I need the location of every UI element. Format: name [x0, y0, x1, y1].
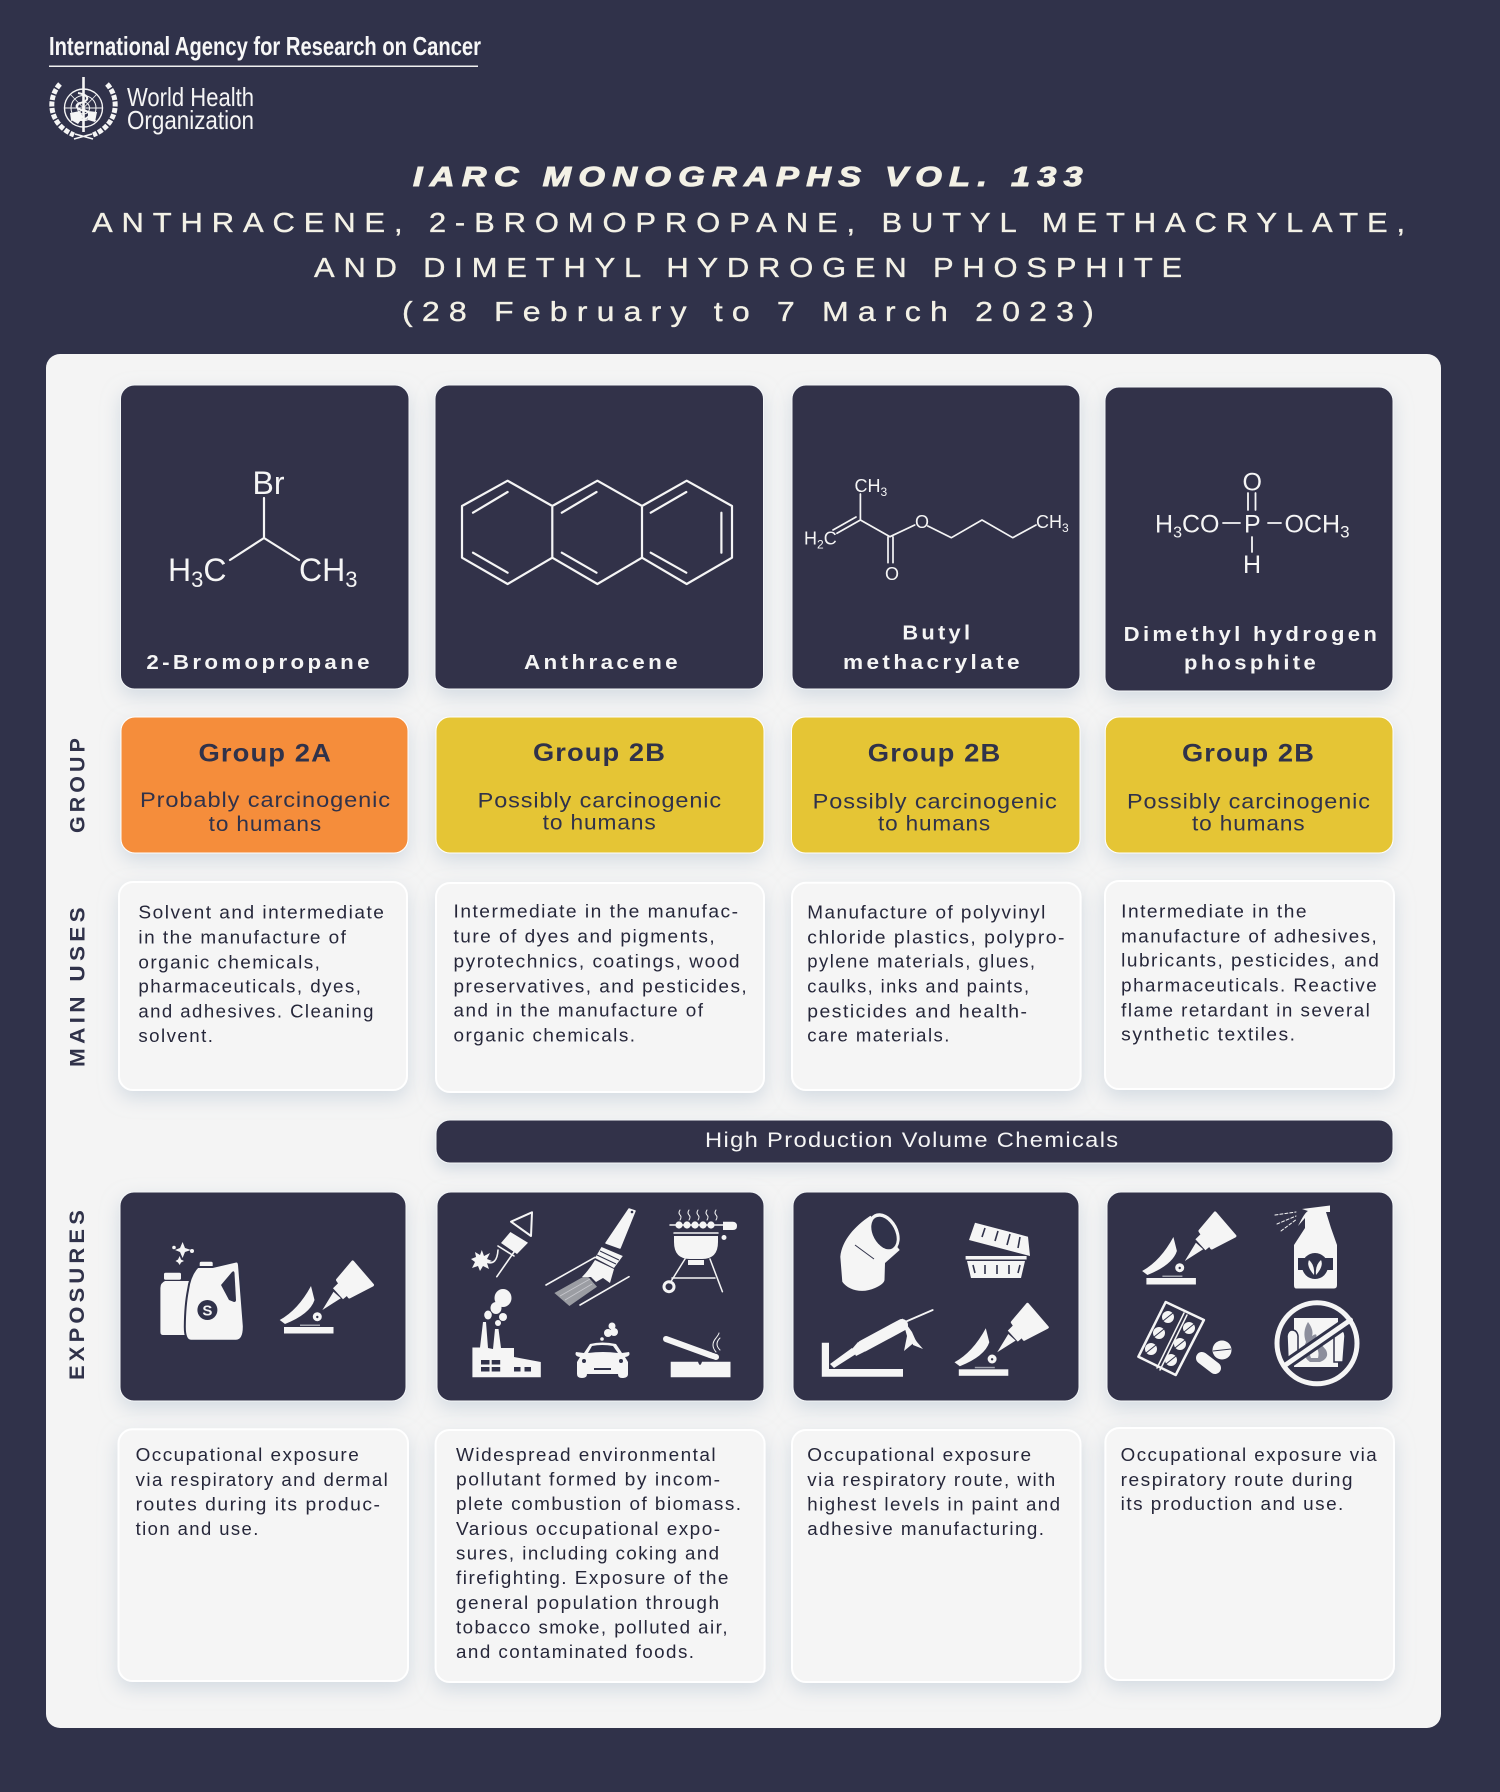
title line: agents: ANTHRACENE, 2-BROMOPROPANE, BUTYL METHACRYLATE, — [92, 207, 1414, 238]
molecule: butyl methacrylate: O — [885, 564, 899, 584]
main uses card: 2-bromopropane: solvent. — [138, 1026, 214, 1046]
main uses card: butyl methacrylate: chloride plastics, polypro- — [807, 927, 1066, 947]
main uses card: anthracene: Intermediate in the manufac- — [454, 902, 740, 922]
main uses card: dimethyl hydrogen phosphite — [1105, 881, 1394, 1089]
icon: cleaning bottles — [160, 1242, 244, 1341]
main uses card: 2-bromopropane: and adhesives. Cleaning — [138, 1001, 375, 1021]
main uses card: 2-bromopropane: in the manufacture of — [138, 927, 347, 947]
main uses card: anthracene: ture of dyes and pigments, — [454, 926, 716, 946]
title line: monograph volume: IARC MONOGRAPHS VOL. 133 — [413, 161, 1090, 192]
molecule: butyl methacrylate: 3 — [1062, 521, 1069, 535]
molecule: 2-bromopropane: C — [203, 552, 226, 588]
molecule: 2-bromopropane — [168, 465, 357, 592]
main uses card: dimethyl hydrogen phosphite: pharmaceuticals. Reactive — [1121, 976, 1378, 996]
molecule: 2-bromopropane: Br — [252, 465, 285, 501]
molecule: butyl methacrylate: 2 — [817, 538, 824, 552]
molecule: butyl methacrylate: CH — [854, 476, 880, 496]
group card: 2B butyl methacrylate: Possibly carcinogenic — [813, 790, 1058, 813]
name: butyl methacrylate — [843, 622, 1023, 674]
main uses card: anthracene: preservatives, and pesticides, — [454, 976, 748, 996]
exposure text card: dimethyl hydrogen phosphite — [1105, 1428, 1394, 1680]
molecule: dimethyl hydrogen phosphite: CO — [1182, 510, 1219, 538]
molecule: 2-bromopropane: 3 — [191, 567, 203, 592]
icon: flame retardant prohibition — [1277, 1303, 1357, 1384]
group card: 2B dimethyl hydrogen phosphite — [1105, 717, 1393, 853]
exposure text card: 2-bromopropane: via respiratory and dermal — [136, 1470, 389, 1490]
IARC name: International Agency for Research on Cancer — [49, 31, 481, 61]
main uses card: 2-bromopropane: pharmaceuticals, dyes, — [138, 977, 362, 997]
group card: 2A: to humans — [209, 813, 322, 836]
header: IARC and WHO logos: Organization — [127, 105, 254, 135]
exposure text card: anthracene: Various occupational expo- — [456, 1519, 722, 1539]
card: anthracene structure — [435, 385, 764, 689]
exposure text card: 2-bromopropane — [118, 1429, 408, 1681]
group card: 2B anthracene: Group 2B — [533, 739, 666, 767]
icon: cigarette and ashtray — [666, 1333, 730, 1377]
exposure text card: 2-bromopropane: tion and use. — [136, 1519, 260, 1539]
name: dimethyl hydrogen phosphite: Dimethyl hydrogen — [1124, 624, 1380, 646]
icon: food container — [966, 1223, 1030, 1278]
main uses card: 2-bromopropane: Solvent and intermediate — [138, 902, 385, 922]
molecule: anthracene — [462, 481, 732, 584]
name: butyl methacrylate: methacrylate — [843, 652, 1023, 674]
exposure text card: anthracene: tobacco smoke, polluted air, — [456, 1617, 729, 1637]
title line: dates: (28 February to 7 March 2023) — [402, 296, 1103, 327]
exposure text card: 2-bromopropane: routes during its produc- — [136, 1495, 382, 1515]
molecule: dimethyl hydrogen phosphite — [1155, 468, 1350, 579]
icon: factory smoke — [472, 1289, 541, 1377]
exposure text card: dimethyl hydrogen phosphite: its production and use. — [1121, 1494, 1345, 1514]
banner: high production volume chemicals: High Production Volume Chemicals — [705, 1129, 1120, 1152]
side label: main uses: MAIN USES — [66, 903, 90, 1067]
main uses card: butyl methacrylate: pylene materials, glues, — [807, 952, 1036, 972]
group card: 2B anthracene — [436, 717, 764, 853]
icon: WHO emblem — [52, 77, 115, 139]
icon: pesticide spray bottle — [1275, 1206, 1337, 1288]
molecule: butyl methacrylate: CH — [1036, 512, 1062, 532]
molecule: dimethyl hydrogen phosphite: H — [1155, 510, 1173, 538]
icon: adhesive bottle — [280, 1262, 372, 1334]
main uses card: dimethyl hydrogen phosphite: lubricants, pesticides, and — [1121, 951, 1380, 971]
icon: adhesive bottle — [1142, 1213, 1235, 1284]
main uses card: butyl methacrylate — [792, 883, 1081, 1090]
exposure card: dimethyl hydrogen phosphite icons — [1107, 1192, 1393, 1401]
exposure text card: dimethyl hydrogen phosphite: respiratory route during — [1121, 1470, 1354, 1490]
side label: group: GROUP — [66, 734, 90, 833]
main uses card: anthracene: and in the manufacture of — [454, 1001, 704, 1021]
exposure text card: 2-bromopropane: Occupational exposure — [136, 1445, 360, 1465]
molecule: dimethyl hydrogen phosphite: P — [1244, 510, 1261, 538]
main uses card: dimethyl hydrogen phosphite: synthetic textiles. — [1121, 1025, 1296, 1045]
molecule: dimethyl hydrogen phosphite: OCH — [1284, 510, 1340, 538]
icon: pipe elbow — [840, 1208, 906, 1291]
main uses card: 2-bromopropane — [119, 882, 407, 1090]
icon: paint brush — [546, 1209, 635, 1306]
main uses card: anthracene: organic chemicals. — [454, 1025, 636, 1045]
exposure text card: butyl methacrylate: highest levels in paint and — [807, 1495, 1062, 1515]
name: dimethyl hydrogen phosphite — [1124, 624, 1380, 674]
group card: 2B dimethyl hydrogen phosphite: Possibly carcinogenic — [1127, 790, 1371, 813]
molecule: 2-bromopropane: H — [168, 552, 191, 588]
exposure text card: anthracene: plete combustion of biomass. — [456, 1494, 742, 1514]
main uses card: butyl methacrylate: pesticides and health- — [807, 1001, 1028, 1021]
exposure text card: butyl methacrylate: adhesive manufacturing. — [807, 1519, 1046, 1539]
WHO name: World Health — [127, 82, 254, 112]
exposure text card: anthracene: and contaminated foods. — [456, 1642, 696, 1662]
main uses card: anthracene: pyrotechnics, coatings, wood — [454, 951, 741, 971]
main uses card: anthracene — [436, 883, 764, 1092]
molecule: dimethyl hydrogen phosphite: 3 — [1340, 522, 1350, 542]
group card: 2A: Probably carcinogenic — [140, 789, 391, 812]
icon: cleaning bottles: S — [202, 1302, 212, 1320]
group card: 2B dimethyl hydrogen phosphite: Group 2B — [1182, 740, 1315, 768]
group card: 2A: Group 2A — [198, 740, 332, 768]
exposure text card: anthracene: pollutant formed by incom- — [456, 1470, 722, 1490]
title block — [92, 161, 1414, 327]
exposure text card: anthracene: general population through — [456, 1593, 720, 1613]
main uses card: butyl methacrylate: caulks, inks and paints, — [807, 977, 1030, 997]
main uses card: butyl methacrylate: care materials. — [807, 1026, 951, 1046]
name: anthracene: Anthracene — [524, 652, 681, 674]
side label: exposures: EXPOSURES — [66, 1206, 89, 1380]
name: butyl methacrylate: Butyl — [902, 622, 973, 644]
icon: firework rocket — [471, 1212, 532, 1277]
molecule: butyl methacrylate: 3 — [880, 485, 888, 499]
exposure card: anthracene icons — [437, 1192, 764, 1401]
title line: agents continued: AND DIMETHYL HYDROGEN PHOSPHITE — [314, 252, 1191, 283]
exposure card: butyl methacrylate icons — [793, 1192, 1079, 1401]
card: 2-bromopropane structure — [120, 385, 409, 689]
molecule: butyl methacrylate: C — [824, 528, 837, 548]
main uses card: dimethyl hydrogen phosphite: manufacture of adhesives, — [1121, 926, 1378, 946]
exposure text card: anthracene: firefighting. Exposure of the — [456, 1568, 730, 1588]
exposure card: 2-bromopropane icons — [120, 1192, 406, 1401]
main uses card: butyl methacrylate: Manufacture of polyvinyl — [807, 902, 1047, 922]
molecule: dimethyl hydrogen phosphite: 3 — [1173, 524, 1182, 542]
molecule: butyl methacrylate: O — [915, 512, 929, 532]
group card: 2A — [121, 717, 408, 853]
exposure text card: butyl methacrylate — [792, 1430, 1080, 1682]
group card: 2B butyl methacrylate: Group 2B — [868, 740, 1001, 768]
icon: car exhaust — [576, 1322, 630, 1378]
main uses card: 2-bromopropane: organic chemicals, — [138, 952, 321, 972]
exposure text card: butyl methacrylate: Occupational exposure — [807, 1445, 1032, 1465]
group card: 2B anthracene: to humans — [543, 812, 657, 834]
molecule: butyl methacrylate — [804, 476, 1069, 584]
icon: pharmaceutical blister and pills — [1138, 1302, 1232, 1375]
name: dimethyl hydrogen phosphite: phosphite — [1184, 652, 1319, 674]
molecule: 2-bromopropane: 3 — [345, 567, 357, 592]
group card: 2B butyl methacrylate — [792, 717, 1080, 853]
card: butyl methacrylate structure — [792, 385, 1080, 689]
molecule: 2-bromopropane: CH — [299, 552, 345, 588]
molecule: butyl methacrylate: H — [804, 528, 817, 548]
panel: main white background — [46, 354, 1441, 1728]
group card: 2B dimethyl hydrogen phosphite: to humans — [1192, 813, 1306, 836]
icon: caulking gun — [822, 1310, 933, 1377]
icon: barbecue grill — [664, 1210, 737, 1292]
exposure text card: anthracene — [436, 1430, 765, 1682]
main uses card: dimethyl hydrogen phosphite: Intermediate in the — [1121, 902, 1308, 922]
icon: adhesive bottle — [954, 1304, 1047, 1376]
exposure text card: anthracene: Widespread environmental — [456, 1445, 717, 1465]
header: IARC and WHO logos — [49, 31, 481, 139]
group card: 2B anthracene: Possibly carcinogenic — [478, 789, 722, 812]
molecule: dimethyl hydrogen phosphite: O — [1242, 468, 1262, 496]
molecule: dimethyl hydrogen phosphite: H — [1243, 551, 1261, 579]
banner: high production volume chemicals — [436, 1120, 1393, 1163]
name: 2-bromopropane: 2-Bromopropane — [146, 652, 373, 674]
group card: 2B butyl methacrylate: to humans — [878, 813, 991, 836]
exposure text card: butyl methacrylate: via respiratory route, with — [807, 1470, 1057, 1490]
card: dimethyl hydrogen phosphite structure — [1105, 387, 1393, 691]
exposure text card: anthracene: sures, including coking and — [456, 1543, 720, 1563]
exposure text card: dimethyl hydrogen phosphite: Occupational exposure via — [1121, 1445, 1378, 1465]
main uses card: dimethyl hydrogen phosphite: flame retardant in several — [1121, 1001, 1371, 1021]
